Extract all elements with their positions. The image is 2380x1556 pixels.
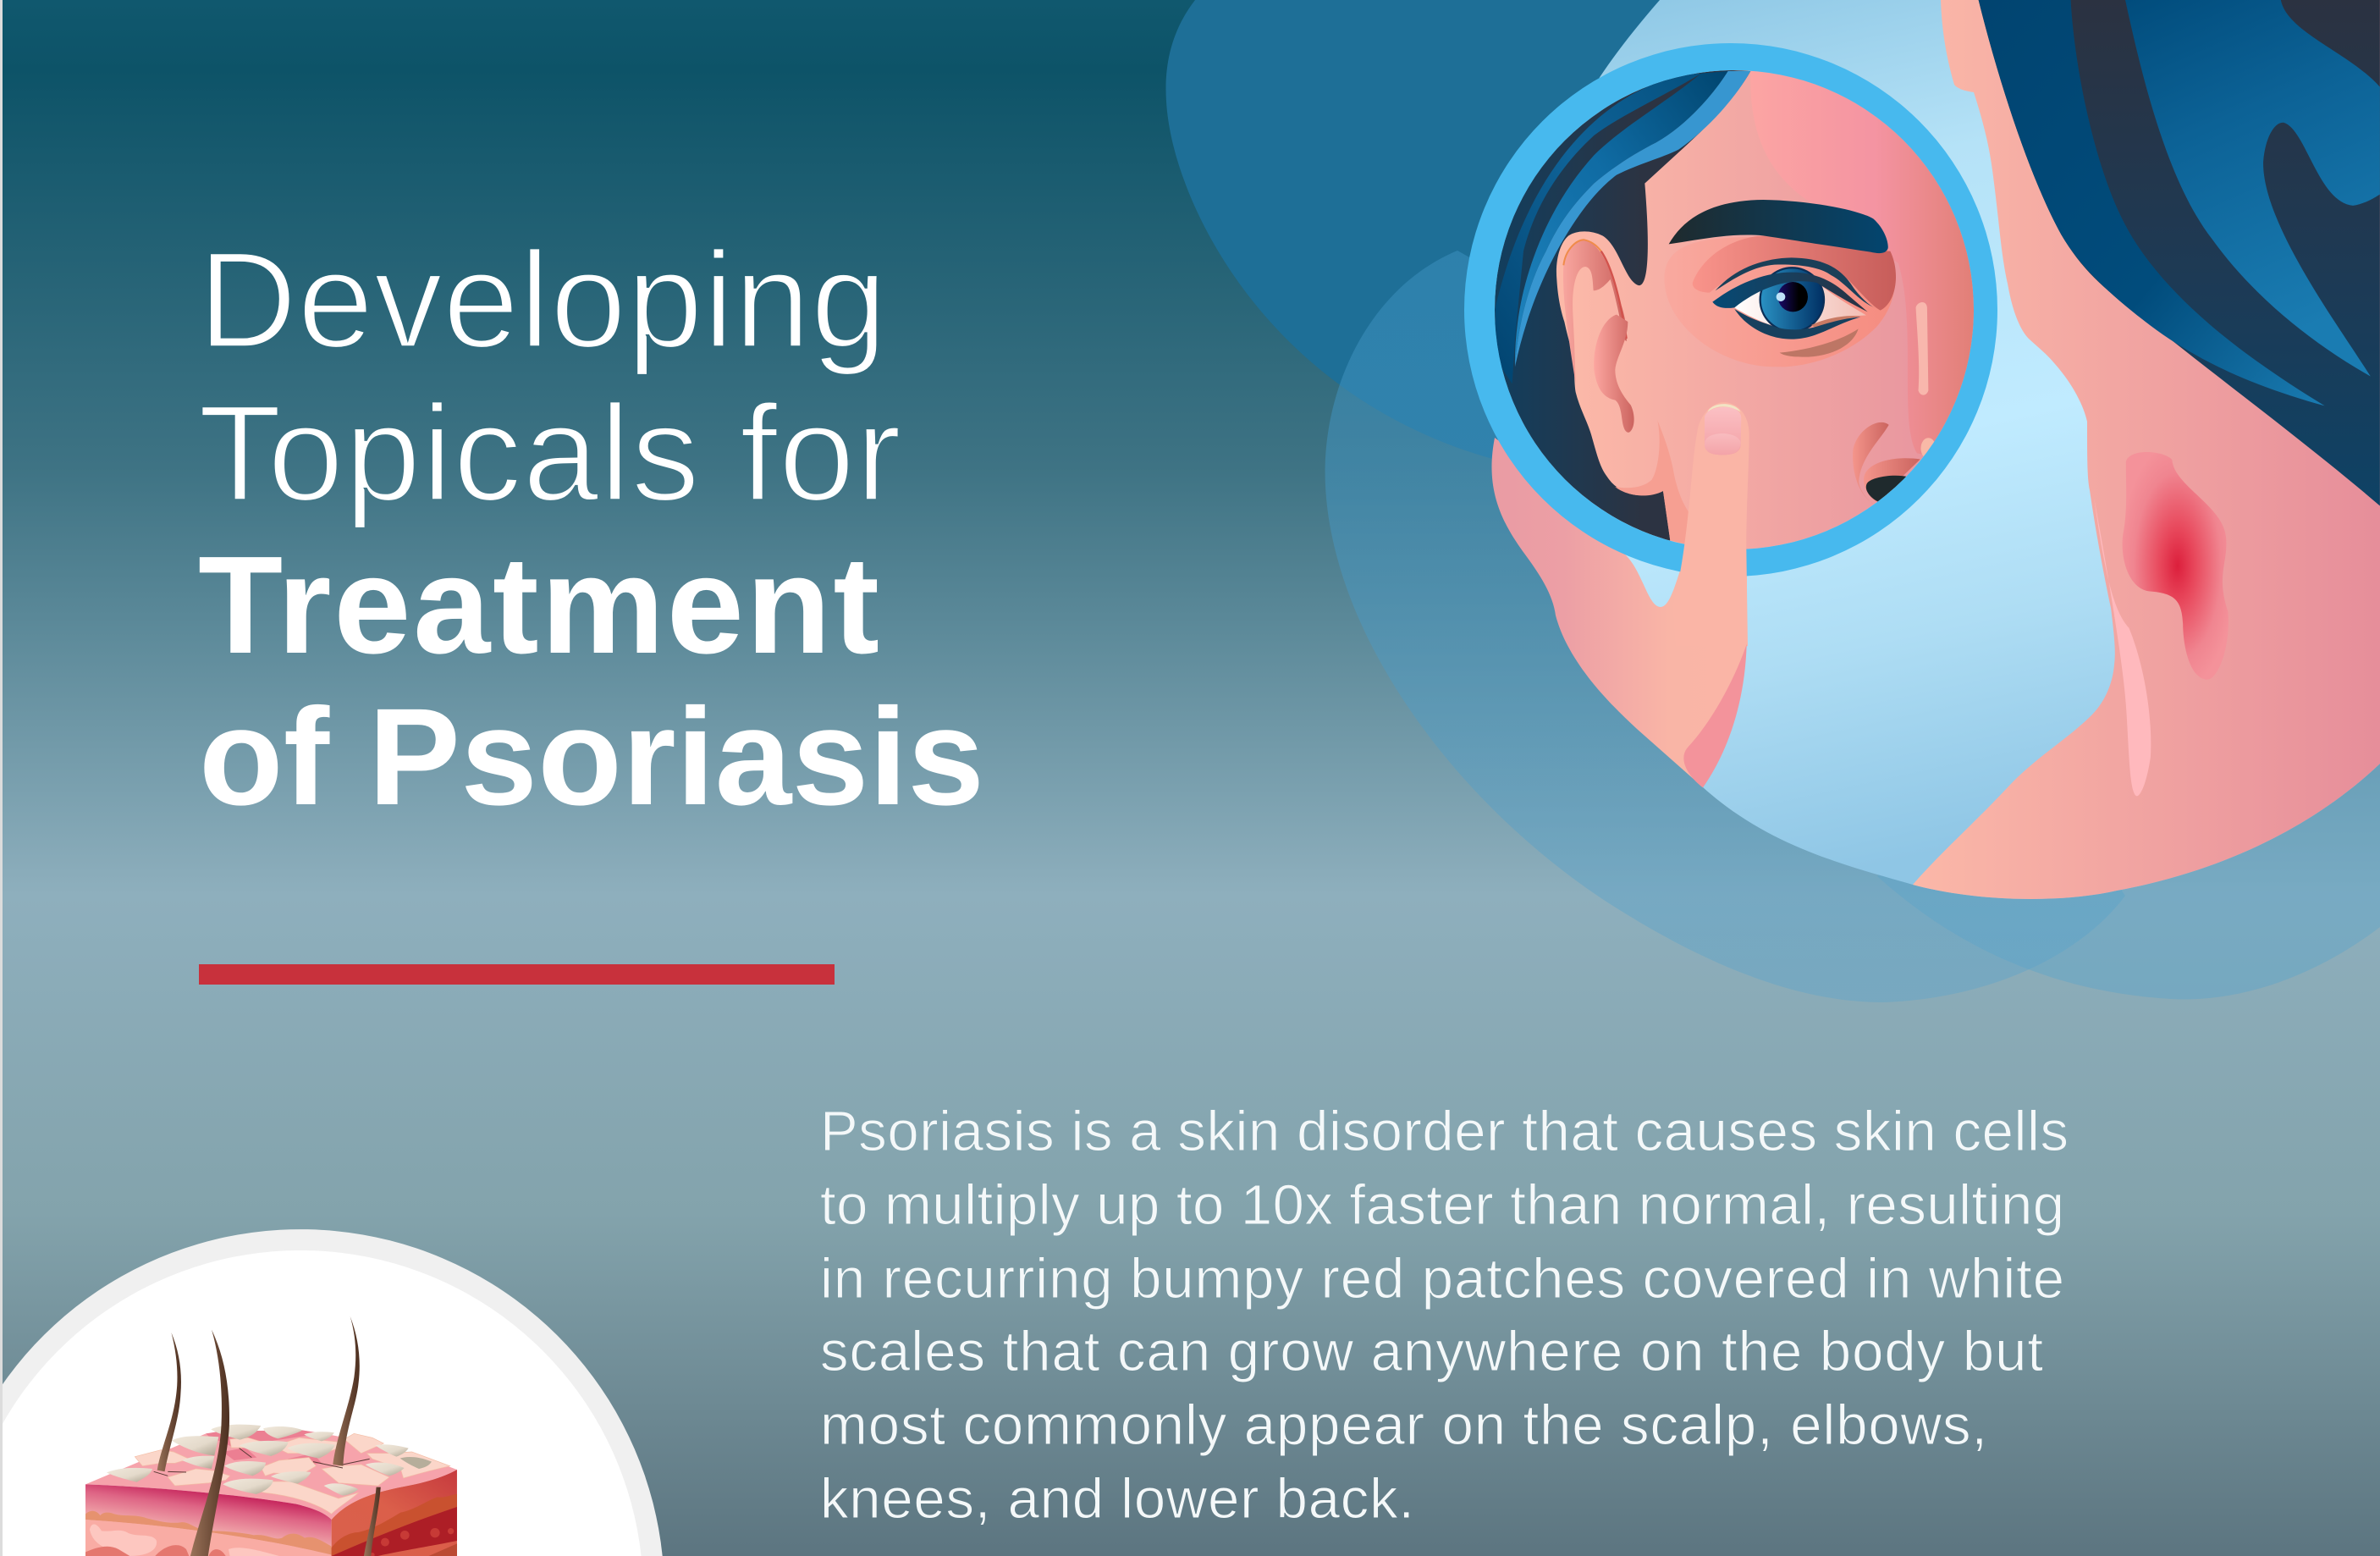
nose tip highlight bbox=[1921, 438, 1934, 456]
red divider bar bbox=[199, 964, 835, 985]
nostril dark bbox=[1866, 476, 1908, 502]
side orange layer bbox=[332, 1494, 457, 1556]
scales bbox=[107, 1425, 432, 1496]
eyelid crease bbox=[1716, 257, 1875, 307]
blob: right bottom translucent bbox=[1877, 762, 2380, 999]
line 6: knees, and lower back. bbox=[820, 1467, 1414, 1531]
arm and palm bbox=[1491, 438, 1747, 787]
skin cross-section circle bbox=[0, 1229, 663, 1556]
eye white bbox=[1734, 282, 1866, 324]
light blue backdrop shape bbox=[1557, 0, 2380, 899]
neck and back skin bbox=[1913, 0, 2380, 899]
circle inner bbox=[0, 1250, 642, 1556]
fingernail bbox=[1705, 407, 1741, 455]
side lower layer bbox=[429, 1543, 457, 1556]
upper lid shading bbox=[1693, 235, 1896, 311]
under-eye crease bbox=[1780, 328, 1859, 357]
nostril bbox=[1864, 458, 1920, 502]
iris bbox=[1760, 268, 1824, 332]
skin block top surface bbox=[85, 1430, 457, 1520]
eye highlight bbox=[1777, 292, 1785, 301]
title bbox=[198, 223, 984, 834]
side red spots bbox=[370, 1528, 454, 1556]
nose highlight bbox=[1916, 302, 1928, 395]
title line: Treatment: Treatment bbox=[198, 527, 879, 682]
front orange layer bbox=[85, 1511, 332, 1555]
hair on the head bbox=[1979, 0, 2380, 506]
hair strand middle bbox=[1515, 71, 1728, 367]
ear interior bbox=[1563, 240, 1627, 383]
nail tip bbox=[1707, 404, 1741, 412]
side red layer bbox=[332, 1507, 457, 1556]
line 3: in recurring bumpy red patches covered in white bbox=[820, 1247, 2064, 1310]
ear rim orange bbox=[1563, 240, 1601, 265]
description paragraph bbox=[820, 1100, 2069, 1531]
ear lobe shadow bbox=[1594, 315, 1634, 433]
lower eyelid tan bbox=[1811, 316, 1860, 328]
left edge strip bbox=[0, 0, 3, 1556]
upper eyelid bbox=[1712, 273, 1868, 312]
skin flakes bbox=[135, 1433, 450, 1514]
hair strand bright bbox=[1515, 71, 1750, 367]
skin block side bbox=[332, 1470, 457, 1556]
line 4: scales that can grow anywhere on the body but bbox=[820, 1320, 2043, 1383]
top surface darker pink bbox=[206, 1430, 322, 1466]
line 2: to multiply up to 10x faster than normal, resulting bbox=[820, 1173, 2064, 1237]
front lower pink layer bbox=[85, 1520, 332, 1556]
title line: of Psoriasis: of Psoriasis bbox=[199, 679, 984, 834]
blob: dark blue top bbox=[1165, 0, 1670, 460]
title line: Developing: Developing bbox=[198, 223, 887, 377]
circle outer ring bbox=[0, 1229, 663, 1556]
hair strand outer bbox=[1496, 74, 1701, 383]
hand shadow bbox=[1683, 644, 1747, 787]
eyebrow bbox=[1669, 200, 1888, 253]
pupil bbox=[1778, 282, 1808, 312]
hair follicle lines bbox=[154, 1448, 370, 1476]
nostril wing bbox=[1853, 422, 1889, 504]
face skin bbox=[1490, 68, 1981, 559]
hair strand large bbox=[2125, 0, 2380, 377]
line 5: most commonly appear on the scalp, elbows, bbox=[820, 1393, 1987, 1457]
ear rim red bbox=[1601, 251, 1627, 339]
hair base reflection bbox=[1495, 70, 1750, 540]
light streak on neck bbox=[2094, 499, 2151, 796]
mirror ring bbox=[1464, 43, 1997, 577]
finger bbox=[1673, 402, 1749, 646]
blob: left large translucent bbox=[1325, 251, 2125, 1002]
decorative blobs behind illustration bbox=[1165, 0, 2380, 1002]
reflected face bbox=[1495, 70, 1974, 549]
red psoriasis patch bbox=[2123, 452, 2228, 680]
front dark waves bbox=[85, 1545, 226, 1556]
eye and brow bbox=[1665, 200, 1896, 367]
title line: Topicals for: Topicals for bbox=[198, 377, 901, 530]
nail lunula bbox=[1705, 433, 1741, 455]
illustration: person looking in a mirror bbox=[1464, 0, 2380, 899]
forehead and temple pink area bbox=[1750, 71, 1974, 454]
skin block front face bbox=[85, 1484, 332, 1556]
front pale wave bbox=[90, 1524, 279, 1556]
eye socket bbox=[1665, 237, 1895, 367]
hair strand left bbox=[1979, 0, 2325, 406]
hair reflection and ear bbox=[1495, 70, 1750, 540]
hair shafts bbox=[157, 1316, 381, 1556]
skin block illustration bbox=[85, 1425, 457, 1556]
jaw shadow bbox=[1615, 421, 1690, 544]
hair base bbox=[1979, 0, 2380, 506]
hand mirror with reflection bbox=[1464, 43, 1998, 577]
line 1: Psoriasis is a skin disorder that causes skin cells bbox=[820, 1100, 2069, 1163]
lower eyelid dark bbox=[1734, 309, 1860, 339]
